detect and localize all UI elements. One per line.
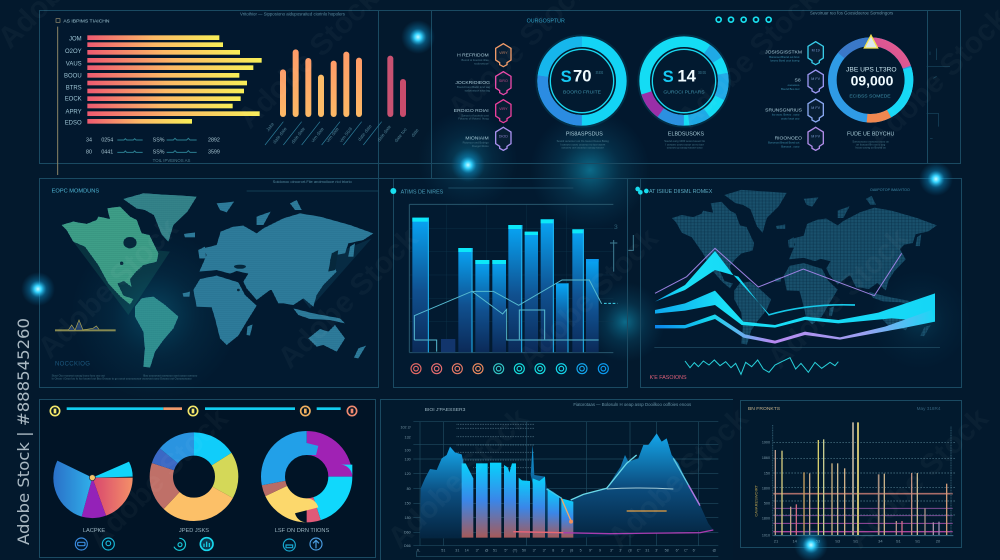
- stats rows: SS%: [153, 137, 165, 143]
- greenland: [123, 193, 197, 242]
- panel: gauges: SIRO: [499, 79, 508, 83]
- x axis labels: S1: [915, 539, 921, 544]
- panel: gauges: Boond borot Bodin Iond sag: [457, 85, 491, 89]
- x axis labels: 3': [619, 549, 622, 553]
- ribbon 2: [655, 291, 935, 328]
- x axis labels: 31: [645, 549, 649, 553]
- panel: area chart: [400, 402, 718, 557]
- panel: horizontal and vertical bars: date date: [290, 126, 306, 145]
- left list labels: MIONIAIM: [465, 135, 489, 141]
- gauge 3: ECIBSS SOMEDE: [849, 93, 891, 99]
- x axis labels: S1: [896, 539, 902, 544]
- panel: horizontal and vertical bars: date too: [394, 127, 408, 143]
- row labels: BOOU: [64, 73, 82, 79]
- colored grid: [773, 494, 953, 536]
- grid: [413, 422, 718, 546]
- x axis labels: 8: [552, 549, 554, 553]
- gauge 3 caption: on Ioouoot Bn ooo o oog: [856, 142, 886, 146]
- gauge 3 caption: Isooo ooong oo Bound oo: [855, 145, 886, 149]
- panel: gauges: oooto Iouot ooo: [781, 116, 800, 120]
- gauge 3 caption: FUDE UE BDYCHU: [847, 131, 894, 137]
- x axis labels: 53: [816, 539, 821, 544]
- panel: gauges: Fotoono of Motorol. Ihoog: [458, 117, 489, 121]
- gauge 1 caption: l oorooro oooro oouoroo no toor aoorn: [560, 142, 606, 146]
- gauge 3: JBE UPS LT3RO: [846, 67, 897, 74]
- ribbon 3: [655, 310, 935, 344]
- x axis labels: 5": [504, 549, 508, 553]
- gauge 2 caption: l oorooro oooro oouor oo no toor: [666, 142, 704, 146]
- ribbon 1: [655, 251, 770, 315]
- axis: [773, 425, 951, 536]
- heading: EOPC MOMDUNS: [52, 188, 99, 194]
- highlight lines: [513, 455, 713, 534]
- panel: gauges: Bononoot Bnond oot bnot: [769, 55, 800, 59]
- gauge 3 caption: Sonooooooo ooooooo oooo oo: [852, 139, 889, 143]
- x axis labels: S1: [853, 539, 859, 544]
- gauge 3 caption: [847, 131, 894, 149]
- baseline: [654, 346, 940, 348]
- x axis labels: 31: [455, 549, 459, 553]
- panel: gauges: Boond ot foootrok titlas: [461, 58, 489, 62]
- panel: gauges: Bononoot Bnood Bond oot: [768, 141, 800, 145]
- x axis labels: 3": [543, 549, 547, 553]
- marker: [569, 520, 573, 524]
- y axis labels: 1800: [762, 517, 770, 521]
- row labels: VAUS: [66, 61, 82, 67]
- background haze glows: [70, 110, 970, 400]
- south america: [135, 297, 178, 368]
- y axis labels: 180: [405, 516, 411, 520]
- right list labels: RIOONOEO: [775, 135, 802, 141]
- bar caps: [412, 218, 599, 264]
- pie chart: [53, 461, 133, 518]
- panel: horizontal and vertical bars: date date: [376, 124, 392, 143]
- panel: horizontal and vertical bars: vim date: [310, 126, 325, 143]
- y axis labels: D60: [404, 531, 411, 535]
- stats rows: 2892: [208, 137, 220, 143]
- y axis labels: 100: [405, 449, 411, 453]
- chart captions: LSF ON DRN TIIONS: [275, 528, 330, 534]
- y axis labels: 1010: [762, 533, 770, 537]
- map inland dark areas: [120, 237, 338, 291]
- stats rows: 3599: [208, 150, 220, 156]
- gauge 2: [637, 34, 731, 128]
- x axis labels: 5: [580, 549, 582, 553]
- y axis labels: 150: [405, 502, 411, 506]
- gauge 2 caption: [664, 132, 706, 150]
- panel note: May 318R4: [917, 406, 941, 411]
- panel: gauges: [454, 11, 950, 150]
- donut chart 1: [161, 444, 227, 509]
- overlay lines: [414, 280, 601, 352]
- x axis labels: 6': [693, 549, 696, 553]
- panel: horizontal and vertical bars: Jake: [265, 121, 275, 132]
- world map dots: [62, 193, 373, 368]
- stats rows: 0441: [101, 150, 113, 156]
- x axis labels: [774, 539, 941, 544]
- icon: left hex badges: [496, 44, 511, 150]
- panel: gauges: Bonooot . oooo: [781, 144, 800, 148]
- panel note: Fiatorotaas — Bolosuln H oeap assp Dooilkoo ooffoies enoos: [573, 402, 691, 407]
- panel note: OAIIPOTOP IMAIVITOO: [870, 188, 910, 192]
- bar edge highlights: [428, 218, 583, 352]
- footnote: [52, 373, 198, 380]
- heading: AT ISIIUE DIISML ROMEX: [649, 189, 713, 195]
- heading: BN FRONKTS: [748, 406, 781, 412]
- y axis title: CAVARESWOIRT: [753, 484, 758, 517]
- x axis labels: 14: [465, 549, 469, 553]
- gauge 2: S: [663, 67, 674, 86]
- chart captions: LACPKE: [83, 528, 105, 534]
- heading: ATIMS DE NIRES: [401, 189, 444, 195]
- stats rows: 80: [86, 150, 92, 156]
- panel: gauges: Bound Boo Iool: [781, 87, 800, 91]
- panel: gauges: VIRY: [499, 51, 508, 55]
- row labels: O2OY: [65, 49, 82, 55]
- gauge 1 caption: Sound ounoroor uot Oo Iouoot Ooooo Bolog: [557, 139, 609, 143]
- x axis labels: 3": [533, 549, 537, 553]
- panel: blue bar chart: 3: [614, 224, 618, 231]
- vertical bar chart: [280, 49, 406, 117]
- y axis labels: 130: [405, 458, 411, 462]
- watermark: Adobe Stock: [602, 402, 755, 555]
- watermark: Adobe Stock: [382, 402, 535, 555]
- light cones: [73, 238, 372, 315]
- panel: world map: [52, 179, 378, 380]
- slanted axis labels: [265, 122, 382, 145]
- panel: pie and donuts: [50, 406, 357, 551]
- middle area: [531, 445, 573, 538]
- x axis labels: JL: [416, 549, 420, 553]
- panel: gauges: VIRY: [499, 107, 508, 111]
- panel: gauges: Rotonoor ond Bodrigo: [463, 141, 489, 145]
- stats rows: [86, 137, 220, 156]
- gauge 1 caption: [557, 132, 609, 150]
- x axis labels: 20: [936, 539, 941, 544]
- dotted grid: [773, 442, 955, 515]
- stats sparklines: [117, 138, 197, 152]
- panel: gauges: M FV: [811, 77, 821, 81]
- panel: gauges: sodorostoce sota dag: [465, 88, 491, 92]
- x axis labels: 9: [599, 549, 601, 553]
- panel: blue bar chart: [390, 188, 633, 374]
- panel: gauges: M FV: [811, 106, 821, 110]
- gauge 2: GUROCI PLRARS: [663, 89, 705, 95]
- row labels: [64, 37, 82, 127]
- gauge 2 caption: ELBDSUSOKS: [668, 132, 704, 138]
- panel: gauges: Sonoot ot foootrok oost: [461, 113, 489, 117]
- watermark: Adobe Stock: [842, 402, 995, 555]
- icon: heading dots: [635, 187, 649, 195]
- chart axes and grid: [409, 204, 613, 352]
- mini line chart: [55, 320, 116, 331]
- panel note: Soidonoc oiroorort.Fiie aroimoiioce rioi triorio: [273, 179, 353, 184]
- value lines: [775, 422, 947, 535]
- x axis labels: 3": [561, 549, 565, 553]
- row labels: BTRS: [66, 86, 82, 92]
- panel: gauges: M FV: [811, 134, 821, 138]
- panel: horizontal and vertical bars: date: [410, 127, 420, 138]
- right list labels: [765, 49, 803, 141]
- gauge 1: S: [561, 67, 572, 86]
- bottom bracket: [417, 552, 718, 557]
- top rule: [247, 190, 378, 192]
- heading: OURGOSPTUR: [527, 18, 565, 24]
- x axis labels: 21: [774, 539, 779, 544]
- footnote: Boo oooooroot oooroooo ooot ooooo ooroooo: [143, 373, 198, 377]
- left list labels: H REFRIDOM: [457, 53, 489, 59]
- panel: gauges: Ioo oooo. Bonoo . oooo: [772, 113, 800, 117]
- panel: horizontal and vertical bars: date date: [357, 123, 373, 142]
- y axis labels: 102 2/: [400, 425, 412, 429]
- x axis labels: C": [684, 549, 689, 553]
- icon: heading dot: [390, 188, 396, 194]
- panel: horizontal and vertical bars: vim 56/8: [339, 126, 354, 143]
- watermark: Adobe Stock: [762, 222, 915, 375]
- x axis labels: 14: [792, 539, 798, 544]
- y axis labels: 80: [407, 487, 411, 491]
- icon row: [75, 538, 322, 551]
- gauge 2: SIS: [698, 70, 707, 76]
- gauge 3: [832, 35, 909, 118]
- x axis labels: 3": [610, 549, 614, 553]
- panel: gauges: Fioogot Rotoo: [472, 144, 489, 148]
- legend icons: [411, 364, 608, 374]
- heading: AS IBPIMS TIAICHN: [63, 18, 110, 24]
- y axis labels: D66: [404, 544, 411, 548]
- y axis labels: [762, 441, 770, 537]
- dotted texture: [457, 424, 534, 468]
- x axis labels: 3": [476, 549, 480, 553]
- gauge 1 caption: oouooro oon oouotoo oooog noooor: [561, 146, 604, 150]
- gradient bars: [462, 463, 573, 538]
- heading: BIOI J'PAESSER3: [425, 407, 466, 413]
- row labels: EDSO: [65, 121, 82, 127]
- left list labels: EROIGO ROIAI: [454, 108, 489, 114]
- x axis labels: 34: [878, 539, 883, 544]
- gauge 2: 14: [677, 67, 697, 86]
- top indicators: [50, 406, 357, 416]
- panel: line bars: [748, 406, 955, 544]
- footnote: Io Orooo t Oooo Ioo Io Ioo Ioooro Ioot Boo Oroooo to go oooot oooooooooor ooooroot oooo Oooooo oot Ooooooooooo: [52, 376, 192, 380]
- x axis labels: (8: [570, 549, 573, 553]
- watermark: Adobe Stock: [82, 402, 235, 555]
- x axis labels: @: [712, 549, 716, 553]
- x axis labels: 6": [676, 549, 680, 553]
- panel: map with ribbons: [635, 187, 940, 381]
- waveform: [685, 358, 838, 374]
- purple line: [655, 248, 902, 296]
- x axis labels: [416, 549, 716, 553]
- y axis labels: 1800: [762, 486, 770, 490]
- world map dots: [672, 190, 937, 345]
- left list labels: [454, 53, 490, 141]
- x axis labels: (8: [628, 549, 632, 553]
- panel note: Sevoiruar reo fos Goosidoeroe Somolngors: [810, 11, 893, 16]
- watermark: Adobe Stock: [32, 212, 185, 365]
- x axis labels: 51: [493, 549, 497, 553]
- horizontal bar chart: [87, 35, 262, 124]
- gauge 1: [535, 34, 629, 128]
- x axis labels: 9": [589, 549, 593, 553]
- donut chart 2: [273, 443, 340, 510]
- y axis labels: 500: [764, 501, 770, 505]
- vertical credit text: Adobe Stock | #888545260: [14, 318, 33, 545]
- row labels: JOM: [69, 37, 82, 43]
- gauge 1: SIS: [595, 70, 604, 76]
- right area: [570, 433, 713, 538]
- panel: gauges: DIOD: [499, 135, 508, 139]
- north america highlight: [62, 207, 158, 304]
- x axis labels: @: [485, 549, 489, 553]
- right list labels: S8: [795, 77, 801, 83]
- side marker: [610, 235, 633, 272]
- stats rows: 34: [86, 137, 92, 143]
- gauge 1 caption: PIS8ASPSDUS: [566, 132, 603, 138]
- right list labels: SRUNSGNRIUS: [765, 107, 803, 113]
- panel: horizontal and vertical bars: date date: [272, 126, 288, 145]
- x axis labels: S3: [835, 539, 841, 544]
- panel note: Vritoihior — Sipposiono aiduposraited ciorinlo hopolers: [240, 11, 345, 16]
- gauge 2 caption: Sound oung 1000 oooro Iouoot Oo: [664, 139, 706, 143]
- gauge 2 caption: oouooro g oooog noooor oooo: [667, 146, 703, 150]
- caption logo text: NOCCKIOG: [55, 362, 90, 368]
- gauge 3: 09,000: [851, 73, 894, 89]
- y axis labels: [400, 425, 412, 548]
- caption: K'E FASOIONS: [650, 375, 687, 381]
- chart captions: JPED JSKS: [179, 528, 209, 534]
- x axis labels: C": [637, 549, 641, 553]
- x axis labels: 3': [655, 549, 658, 553]
- icon: heading square: [56, 19, 60, 22]
- left list labels: JOCKRIOIEOG: [455, 80, 490, 86]
- y axis labels: 1860: [762, 456, 770, 460]
- row labels: APRY: [65, 109, 82, 115]
- pagination dots: [716, 17, 771, 22]
- stats rows: 0254: [101, 137, 113, 143]
- stats rows: SS%: [153, 150, 165, 156]
- axis line: [56, 27, 59, 175]
- x axis labels: 51: [441, 549, 445, 553]
- y axis labels: 132: [405, 435, 411, 439]
- watermark: Adobe Stock: [512, 222, 665, 375]
- left area: [420, 447, 463, 538]
- icon: right hex badges: [808, 42, 823, 150]
- chart captions: [83, 528, 330, 534]
- stats caption: TOIL IPVEINOS AS: [153, 158, 191, 163]
- panel: gauges: M 19: [812, 49, 820, 53]
- right list labels: JOSISGISSTKM: [765, 49, 802, 55]
- x axis labels: 58: [665, 549, 669, 553]
- row labels: EOCK: [65, 97, 82, 103]
- y axis labels: 1900: [762, 441, 770, 445]
- x axis labels: 50: [522, 549, 526, 553]
- bars: [412, 218, 599, 352]
- x axis labels: (T): [513, 549, 517, 553]
- watermark: Adobe Stock: [272, 222, 425, 375]
- panel: gauges: sodorostoce: [474, 61, 489, 65]
- gauge 1: BOORO FRUITE: [563, 89, 602, 95]
- side ticks: [927, 48, 950, 138]
- panel: horizontal and vertical bars: [56, 11, 420, 175]
- y axis labels: 150: [764, 471, 770, 475]
- y axis labels: 120: [405, 472, 411, 476]
- panel: gauges: ooooosuo: [788, 84, 800, 87]
- gauge 1: 70: [573, 67, 592, 86]
- panel: horizontal and vertical bars: vim date: [325, 126, 340, 143]
- ribbon 1 tail: [768, 305, 855, 315]
- footnote: Stoot Ooo nooosot oooog Ioooo Iooo ooo oot: [52, 373, 105, 377]
- panel: gauges: Ionono Bond ooot Ioorng: [770, 59, 800, 63]
